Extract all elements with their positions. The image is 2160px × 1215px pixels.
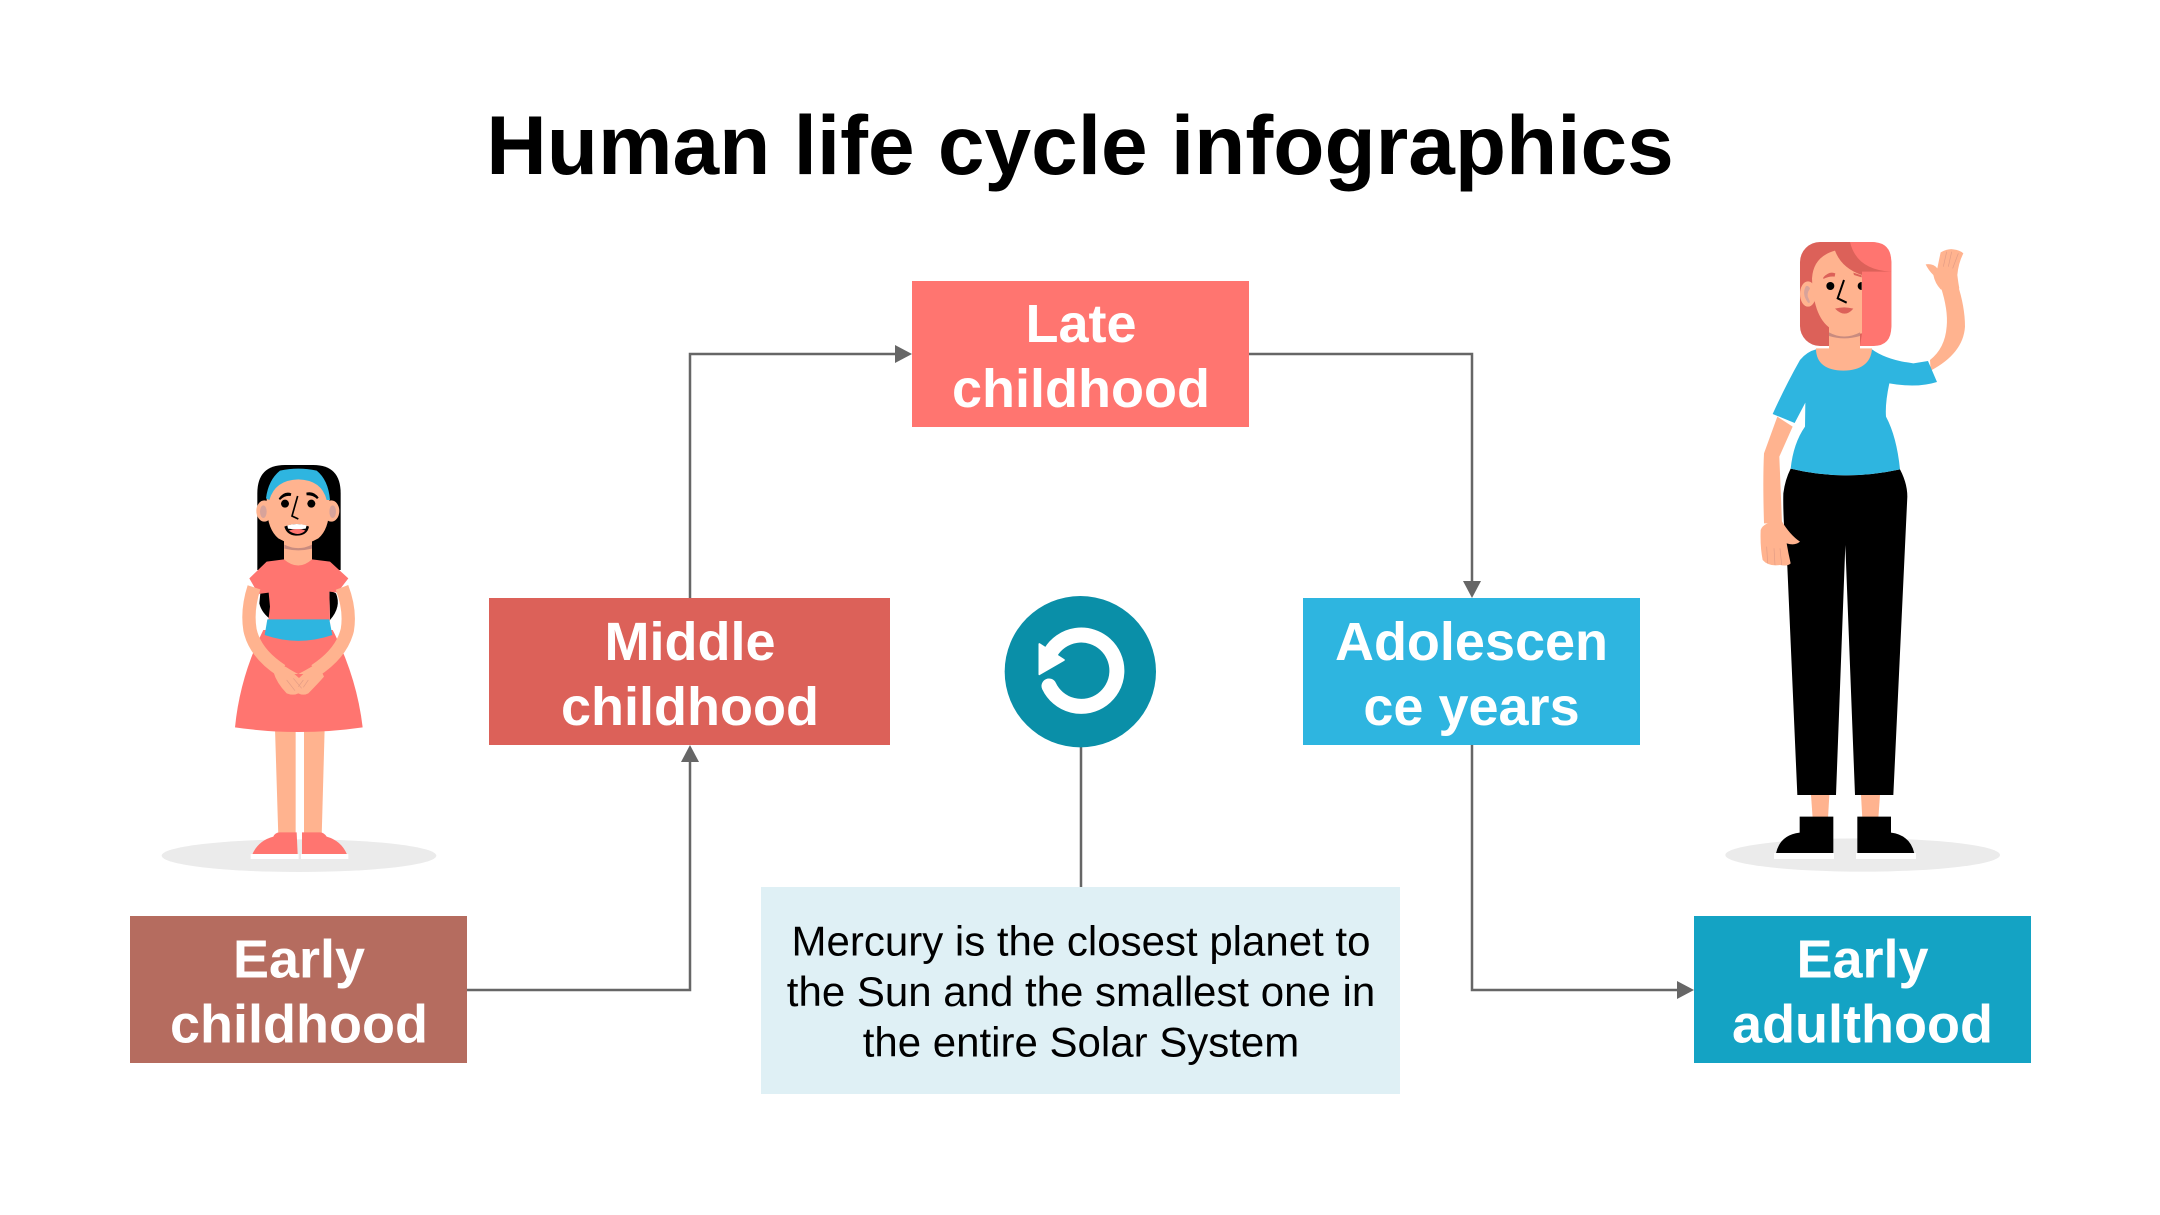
- ear: [1800, 281, 1816, 307]
- character: woman (early adulthood): [1725, 242, 2000, 872]
- arrow: late childhood to adolescence: [1249, 354, 1481, 598]
- title: Human life cycle infographics: [486, 98, 1674, 192]
- box: early adulthood: adulthood: [1732, 994, 1993, 1054]
- text block: mercury description: the entire Solar System: [863, 1018, 1299, 1066]
- box: middle childhood: Middle: [604, 612, 776, 672]
- pants: [1783, 469, 1907, 795]
- skirt: [235, 630, 363, 732]
- arrow: adolescence to early adulthood: [1472, 745, 1694, 999]
- box: middle childhood: [489, 598, 890, 745]
- neck: [1816, 327, 1872, 373]
- ground shadow: [1725, 838, 2000, 872]
- lowered arm: [1763, 417, 1793, 523]
- box: early childhood: Early: [233, 930, 365, 990]
- icon: cycle arrow in circle: [1005, 596, 1156, 747]
- character: girl (early childhood): [162, 465, 436, 872]
- hair: [257, 465, 341, 620]
- text block: mercury description: [761, 887, 1400, 1094]
- face: [279, 492, 319, 536]
- text block: mercury description: the Sun and the smallest one in: [787, 968, 1375, 1015]
- headband: [266, 469, 330, 500]
- arrow: middle childhood to late childhood: [690, 345, 912, 598]
- lowered hand: [1761, 521, 1800, 566]
- box: adolescence years: Adolescen: [1335, 612, 1608, 672]
- text block: mercury description: Mercury is the closest planet to: [792, 918, 1370, 964]
- neck: [284, 540, 312, 568]
- shoes: [251, 832, 348, 859]
- ground shadow: [162, 839, 436, 872]
- hair: [1800, 242, 1891, 346]
- box: early adulthood: [1694, 916, 2031, 1063]
- dress bodice: [249, 559, 348, 621]
- box: early childhood: [130, 916, 467, 1063]
- box: adolescence years: ce years: [1363, 677, 1580, 737]
- arrow: early childhood to middle childhood: [467, 745, 699, 990]
- neck shadow: [284, 545, 312, 550]
- ankles: [1811, 795, 1880, 818]
- legs: [275, 728, 325, 837]
- box: early adulthood: Early: [1796, 930, 1929, 990]
- ears: [256, 500, 339, 522]
- connector: cycle icon to text box: [1080, 745, 1082, 887]
- box: adolescence years: [1303, 598, 1640, 745]
- belt: [265, 619, 332, 641]
- box: early childhood: childhood: [170, 994, 428, 1054]
- head: [267, 477, 329, 544]
- box: middle childhood: childhood: [561, 677, 819, 737]
- shoes: [1774, 817, 1916, 859]
- shirt: [1773, 349, 1937, 475]
- face: [1812, 251, 1862, 338]
- box: late childhood: Late: [1025, 294, 1137, 354]
- raised hand: [1926, 249, 1963, 290]
- box: late childhood: [912, 281, 1249, 427]
- arms: [249, 587, 348, 671]
- box: late childhood: childhood: [952, 359, 1210, 419]
- raised arm: [1930, 283, 1965, 371]
- hands: [273, 666, 324, 695]
